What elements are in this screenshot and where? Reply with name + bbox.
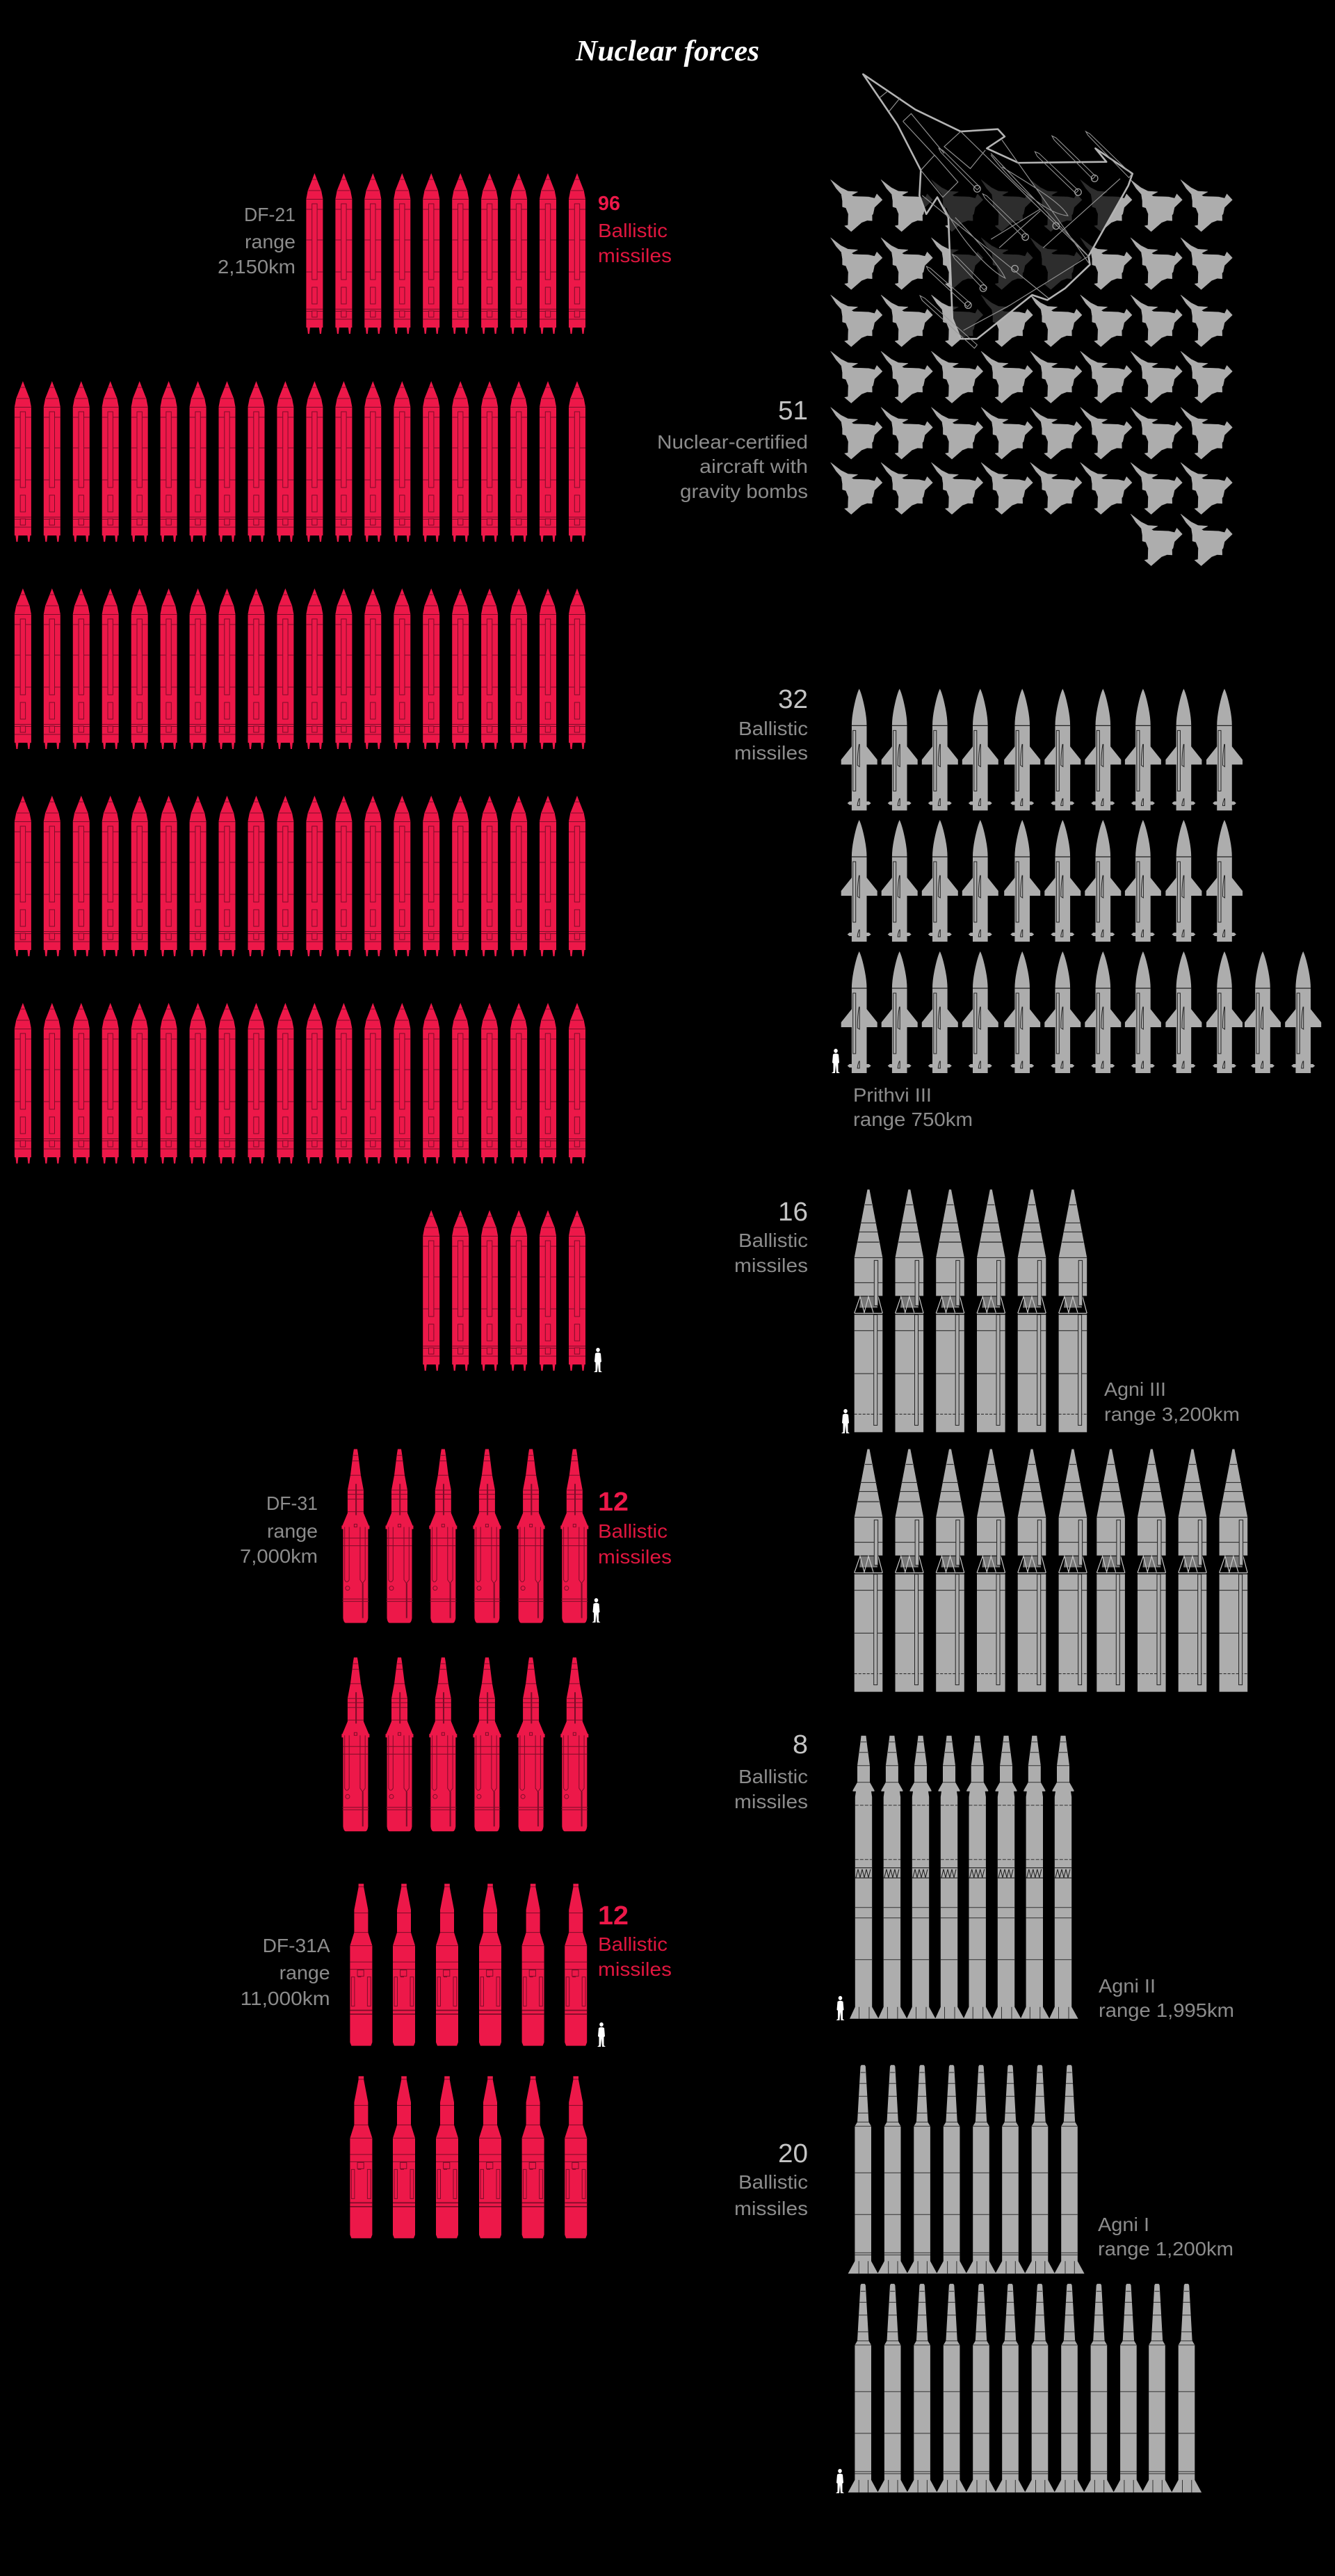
panel: Agni II missiles (734, 1730, 1234, 2021)
Agni II row (850, 1736, 1078, 2019)
DF-31 label: 7,000km (240, 1545, 318, 1567)
DF-31A count (598, 1901, 672, 1980)
DF-21 row 5 (15, 1003, 585, 1164)
DF-21 row 6 (423, 1210, 585, 1371)
Agni III count label: Ballistic (738, 1230, 808, 1251)
panel: Agni III missiles (734, 1189, 1247, 1692)
Agni I count label: missiles (734, 2198, 808, 2219)
Prithvi count label: 32 (778, 685, 808, 714)
DF-31 label (240, 1492, 318, 1567)
DF-31 count: missiles (598, 1546, 672, 1568)
aircraft label (657, 396, 808, 502)
DF-21 row 1 (306, 173, 585, 334)
DF-21 count (598, 193, 672, 266)
panel: Prithvi III missiles (734, 685, 1321, 1130)
Agni I name and range: range 1,200km (1098, 2238, 1233, 2260)
icon: person for scale (594, 1348, 602, 1372)
Agni III name and range: range 3,200km (1104, 1403, 1240, 1425)
DF-31 label: DF-31 (266, 1492, 318, 1514)
DF-31A row 2 (350, 2076, 587, 2238)
icon: person for scale (836, 2469, 844, 2493)
DF-31A count: missiles (598, 1958, 672, 1980)
icon: person for scale (597, 2022, 606, 2047)
aircraft label: gravity bombs (680, 481, 808, 502)
Agni I count label: Ballistic (738, 2171, 808, 2193)
Prithvi count label: missiles (734, 742, 808, 764)
icon: person for scale (832, 1049, 840, 1073)
DF-21 label: 2,150km (218, 256, 296, 277)
aircraft label: 51 (778, 396, 808, 426)
Agni III name and range (1104, 1378, 1240, 1425)
panel: DF-31 missiles (240, 1449, 672, 1831)
DF-21 count: 96 (598, 193, 620, 215)
panel: DF-21 missiles (15, 173, 672, 1372)
Agni III count label: missiles (734, 1255, 808, 1276)
Agni III row 2 (855, 1449, 1247, 1692)
DF-31 count: Ballistic (598, 1520, 668, 1542)
DF-21 count: missiles (598, 245, 672, 266)
panel: nuclear-certified aircraft (657, 74, 1232, 566)
icon: person for scale (592, 1598, 601, 1623)
DF-21 count: Ballistic (598, 220, 668, 241)
icon: person for scale (836, 1996, 844, 2020)
aircraft label: Nuclear-certified (657, 431, 808, 453)
Prithvi count label: Ballistic (738, 718, 808, 739)
DF-31A row 1 (350, 1884, 587, 2046)
DF-31 row 1 (341, 1449, 588, 1623)
Agni I row 1 (848, 2065, 1085, 2273)
DF-31 count: 12 (598, 1488, 629, 1517)
DF-21 row 3 (15, 588, 585, 749)
DF-31A count: 12 (598, 1901, 629, 1931)
Agni II count label: 8 (793, 1730, 808, 1760)
Agni I name and range: Agni I (1098, 2214, 1149, 2235)
DF-21 row 4 (15, 796, 585, 956)
DF-31A label: 11,000km (241, 1988, 330, 2009)
Agni III count label (734, 1198, 808, 1276)
Agni II name and range: Agni II (1099, 1975, 1156, 1997)
panel: DF-31A missiles (241, 1884, 672, 2238)
Agni II name and range: range 1,995km (1099, 1999, 1234, 2021)
Prithvi name and range: Prithvi III (853, 1084, 932, 1106)
icon: person for scale (841, 1409, 850, 1433)
aircraft label: aircraft with (699, 456, 808, 477)
Agni II count label: Ballistic (738, 1766, 808, 1787)
Prithvi row 2 (841, 820, 1243, 942)
Agni III name and range: Agni III (1104, 1378, 1166, 1400)
title: Nuclear forces (575, 35, 759, 67)
Agni III count label: 16 (778, 1198, 808, 1227)
DF-31 label: range (267, 1520, 318, 1542)
Prithvi row 1 (841, 689, 1243, 810)
Agni II count label (734, 1730, 808, 1812)
Prithvi row 3 (841, 951, 1321, 1073)
Agni II name and range (1099, 1975, 1234, 2021)
DF-31A label: range (280, 1962, 330, 1983)
Prithvi count label (734, 685, 808, 764)
Prithvi name and range: range 750km (853, 1109, 973, 1130)
Agni I row 2 (848, 2284, 1202, 2493)
DF-21 label: DF-21 (244, 204, 296, 225)
Agni III row 1 (855, 1189, 1087, 1432)
DF-31A label (241, 1935, 330, 2009)
large aircraft outline (863, 74, 1133, 348)
Agni II count label: missiles (734, 1791, 808, 1812)
DF-21 row 2 (15, 381, 585, 542)
panel: Agni I missiles (734, 2065, 1233, 2493)
DF-31 row 2 (341, 1657, 588, 1831)
DF-31A label: DF-31A (263, 1935, 330, 1956)
Agni I name and range (1098, 2214, 1233, 2260)
Prithvi name and range (853, 1084, 973, 1130)
aircraft grid (831, 179, 1232, 566)
DF-31A count: Ballistic (598, 1933, 668, 1955)
DF-21 label: range (245, 231, 296, 252)
Agni I count label (734, 2139, 808, 2219)
DF-21 label (218, 204, 296, 277)
Agni I count label: 20 (778, 2139, 808, 2168)
DF-31 count (598, 1488, 672, 1568)
